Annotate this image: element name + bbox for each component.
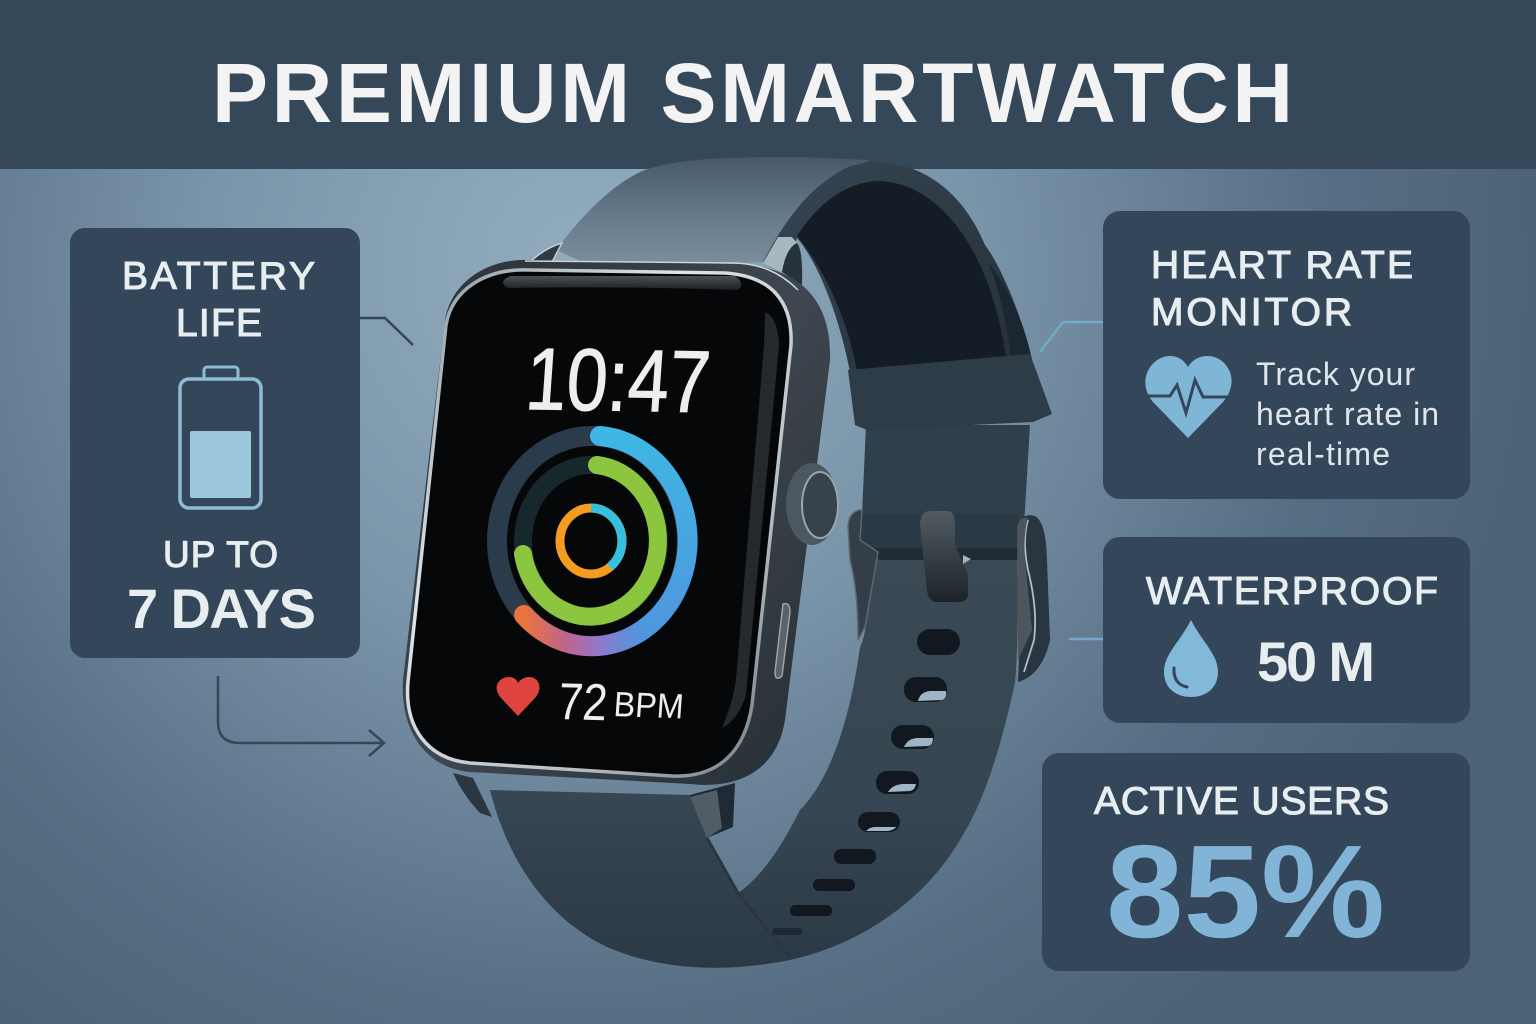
header band	[0, 0, 1536, 169]
text: up to 7 days: UP TO	[163, 534, 278, 575]
middle ring	[523, 465, 659, 617]
connector: heart rate	[1040, 322, 1103, 352]
icon: battery	[180, 367, 261, 508]
value: 85%: 85%	[1106, 818, 1385, 965]
strap hole highlights	[866, 691, 946, 831]
heading: battery life	[122, 255, 315, 345]
glass highlights	[503, 276, 779, 728]
connector: waterproof	[1069, 638, 1103, 640]
description: real-time	[1256, 436, 1390, 472]
title: PREMIUM SMARTWATCH	[212, 46, 1293, 140]
screen	[413, 276, 782, 768]
text: up to 7 days: 7 DAYS	[127, 577, 316, 640]
upper strap	[556, 157, 1032, 372]
text: up to 7 days	[127, 534, 316, 640]
buckle	[848, 510, 1050, 682]
panel: active users	[1042, 753, 1470, 971]
heading: heart rate monitor	[1151, 244, 1413, 334]
icon: heart	[497, 677, 539, 716]
lugs	[453, 237, 802, 838]
icon: water drop	[1164, 620, 1218, 697]
heading: heart rate monitor: MONITOR	[1151, 291, 1352, 334]
strap middle	[860, 425, 1030, 560]
description	[1256, 356, 1439, 472]
panel: waterproof	[1103, 537, 1470, 723]
description: heart rate in	[1256, 396, 1439, 432]
watch	[403, 157, 1052, 968]
strap fold	[707, 838, 790, 958]
icon: heart with pulse	[1145, 356, 1232, 438]
case	[403, 260, 830, 785]
value: 50 m: 50 M	[1257, 630, 1375, 693]
crown	[786, 463, 838, 545]
strap loop	[848, 354, 1052, 430]
time: 10:47	[523, 329, 714, 431]
activity rings	[497, 436, 688, 646]
side button	[775, 604, 790, 678]
description: Track your	[1256, 356, 1415, 392]
outer ring	[497, 436, 688, 646]
lower strap	[490, 552, 1018, 968]
heart rate reading: BPM	[612, 685, 685, 726]
heading: heart rate monitor: HEART RATE	[1151, 244, 1413, 287]
metal bezel	[408, 270, 791, 776]
inner ring	[560, 508, 622, 574]
heading: active users: ACTIVE USERS	[1094, 780, 1389, 823]
strap holes	[772, 629, 960, 935]
panel: battery life	[70, 228, 360, 658]
heart rate reading	[556, 673, 685, 732]
heading: battery life: LIFE	[176, 302, 262, 345]
heading: waterproof: WATERPROOF	[1146, 570, 1438, 613]
connector: battery to watch	[360, 318, 413, 345]
heading: battery life: BATTERY	[122, 255, 315, 298]
heart rate reading: 72	[556, 673, 610, 732]
case top highlight	[525, 261, 798, 290]
panel: heart rate monitor	[1103, 211, 1470, 499]
arrow: battery to watch	[218, 676, 384, 756]
